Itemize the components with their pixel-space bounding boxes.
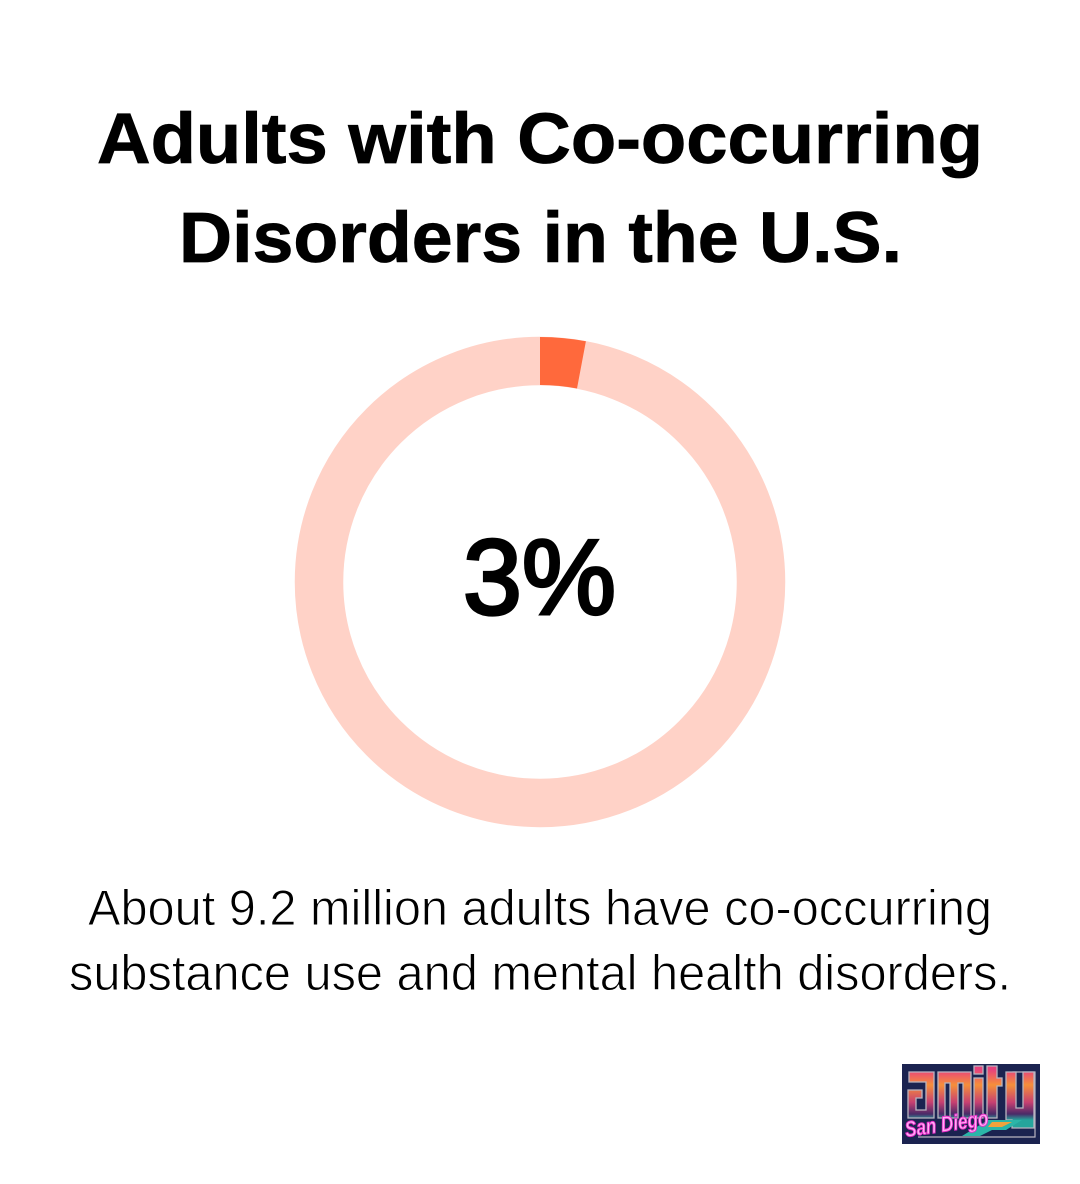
logo letters [908, 1066, 1034, 1128]
logo: Amity San Diego [902, 1064, 1040, 1144]
logo script: San Diego [903, 1106, 990, 1142]
description text [69, 880, 1011, 1001]
title: Adults with Co-occurring [97, 100, 983, 179]
donut chart: 3% [319, 337, 761, 803]
logo outer frame line [918, 1072, 1035, 1137]
title: Disorders in the U.S. [179, 199, 902, 278]
logo beach stripe [962, 1120, 1022, 1136]
title [97, 100, 983, 278]
donut track [319, 361, 761, 803]
description text: substance use and mental health disorders. [69, 945, 1011, 1001]
donut value: 3% [463, 517, 616, 637]
donut highlighted segment [540, 337, 586, 388]
description text: About 9.2 million adults have co-occurring [88, 880, 992, 936]
